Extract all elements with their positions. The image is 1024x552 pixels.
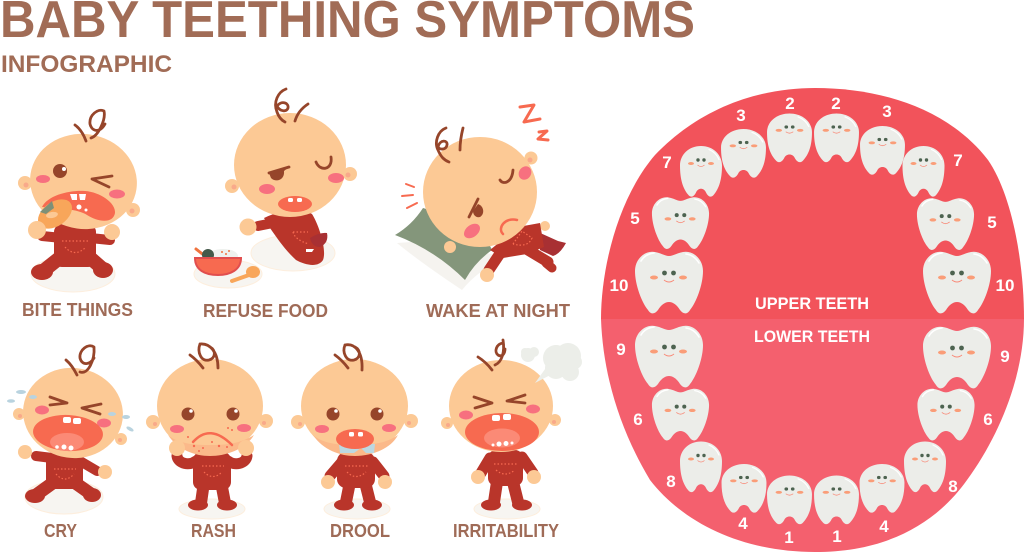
mouth xyxy=(42,191,115,221)
tooth 5 upper right: 5 xyxy=(987,213,997,232)
body xyxy=(480,221,566,282)
upper teeth row xyxy=(610,94,1014,313)
tooth 5 upper left xyxy=(630,197,709,249)
label: refuse food: REFUSE FOOD xyxy=(203,301,328,321)
steam cloud xyxy=(521,343,582,383)
tooth 10 upper left: 10 xyxy=(610,276,628,295)
cheeks xyxy=(516,164,534,182)
hands xyxy=(28,221,46,239)
tooth 4 lower left xyxy=(722,464,766,533)
wink xyxy=(316,157,331,168)
tooth 1 lower right xyxy=(814,476,859,546)
tooth 6 lower right xyxy=(917,389,993,441)
ground shadow xyxy=(179,499,245,519)
ground shadow xyxy=(474,499,540,519)
tooth 7 upper left xyxy=(662,146,722,197)
tooth 4 lower right: 4 xyxy=(879,517,889,536)
hair xyxy=(276,89,308,122)
tooth 9 lower left: 9 xyxy=(616,340,626,359)
eye xyxy=(53,164,67,178)
subtitle: INFOGRAPHIC xyxy=(1,51,172,78)
tooth 10 upper right: 10 xyxy=(996,276,1014,295)
tooth 2 upper right: 2 xyxy=(831,94,841,113)
ear xyxy=(444,241,456,253)
label: rash: RASH xyxy=(191,521,236,541)
tooth 7 upper right xyxy=(902,146,963,197)
ground shadow xyxy=(31,256,115,292)
tooth 8 lower left: 8 xyxy=(666,472,676,491)
hands xyxy=(169,440,185,456)
cheeks xyxy=(35,406,49,414)
tooth 3 upper left xyxy=(721,106,766,178)
tooth 8 lower right: 8 xyxy=(948,477,958,496)
head xyxy=(449,360,553,452)
upper gum xyxy=(601,88,1024,319)
head xyxy=(17,361,129,465)
label: drool: DROOL xyxy=(330,521,390,541)
lower teeth label: LOWER TEETH xyxy=(754,328,870,346)
baby: rash xyxy=(146,344,273,519)
hair xyxy=(66,346,94,375)
tooth 8 lower right xyxy=(904,442,958,496)
tooth 6 lower left xyxy=(633,389,709,441)
teething ring xyxy=(33,193,77,235)
ears xyxy=(18,176,32,190)
tooth 2 upper left xyxy=(767,94,812,162)
upper teeth label: UPPER TEETH xyxy=(755,295,869,313)
body xyxy=(177,452,247,510)
ground shadow xyxy=(324,499,390,519)
food plate and bowl xyxy=(194,249,262,288)
chin shade xyxy=(168,435,254,456)
lower teeth row xyxy=(616,326,1010,547)
eyes xyxy=(182,408,194,420)
tooth 9 lower left xyxy=(616,326,703,387)
tooth 1 lower left xyxy=(767,476,812,547)
tooth 8 lower left xyxy=(666,442,722,492)
tooth 4 lower left: 4 xyxy=(738,514,748,533)
eyes xyxy=(326,408,340,420)
tooth 5 upper right xyxy=(917,198,997,250)
hair xyxy=(75,110,105,141)
label: irritability: IRRITABILITY xyxy=(453,521,559,541)
tooth 9 lower right: 9 xyxy=(1000,347,1010,366)
ears xyxy=(13,408,25,420)
tooth 3 upper right xyxy=(860,102,905,175)
baby: irritability xyxy=(441,340,582,519)
hair xyxy=(478,340,505,370)
mouth xyxy=(336,429,374,449)
tooth 9 lower right xyxy=(923,327,1010,388)
baby: wake at night xyxy=(395,105,566,290)
open eye xyxy=(473,204,483,217)
hair xyxy=(436,128,463,162)
cheeks xyxy=(459,410,473,420)
body xyxy=(31,224,113,280)
teeth xyxy=(70,194,86,200)
ears xyxy=(146,415,160,429)
cheeks xyxy=(170,425,184,433)
body xyxy=(321,452,392,510)
label: cry: CRY xyxy=(44,521,77,541)
squeezed eyes xyxy=(50,397,101,414)
rash dots xyxy=(187,427,233,452)
head xyxy=(301,359,408,453)
angry eye xyxy=(269,167,289,180)
ears xyxy=(291,415,305,429)
tooth 1 lower right: 1 xyxy=(832,527,842,546)
cheeks xyxy=(36,175,50,183)
hair xyxy=(190,344,218,368)
tooth 2 upper right xyxy=(814,94,859,162)
tooth 7 upper left: 7 xyxy=(662,153,672,172)
snoring z xyxy=(520,105,548,140)
tooth 3 upper right: 3 xyxy=(882,102,892,121)
cheeks xyxy=(315,425,329,433)
winking eye xyxy=(92,176,112,187)
tooth 4 lower right xyxy=(860,464,904,536)
ears xyxy=(225,179,239,193)
tooth 7 upper right: 7 xyxy=(953,151,963,170)
tears xyxy=(7,390,134,433)
tooth 10 upper left xyxy=(610,252,703,313)
body xyxy=(18,445,112,503)
tooth 2 upper left: 2 xyxy=(785,94,795,113)
teeth xyxy=(492,415,500,421)
lower gum xyxy=(601,319,1024,552)
teeth xyxy=(63,417,71,423)
chin shade xyxy=(313,435,398,456)
tooth 6 lower right: 6 xyxy=(983,410,993,429)
tooth 5 upper left: 5 xyxy=(630,209,640,228)
panel: mouth teeth chart xyxy=(601,88,1024,552)
head xyxy=(157,359,263,453)
mouth xyxy=(501,219,517,234)
mouth xyxy=(465,413,539,451)
pillow xyxy=(395,208,505,290)
tooth 1 lower left: 1 xyxy=(784,528,794,547)
frown xyxy=(193,433,232,445)
ground shadow xyxy=(251,235,335,271)
body xyxy=(471,450,541,510)
baby: refuse food xyxy=(194,89,357,288)
restless marks xyxy=(402,184,417,208)
label: wake at night: WAKE AT NIGHT xyxy=(426,301,570,321)
baby: bite things xyxy=(18,110,143,292)
mouth xyxy=(32,413,104,453)
ears xyxy=(441,417,453,429)
head xyxy=(234,113,346,217)
drool xyxy=(339,444,375,453)
closed eye xyxy=(500,170,513,183)
tooth 10 upper right xyxy=(923,252,1014,313)
baby: drool xyxy=(291,345,418,519)
squeezed eyes xyxy=(474,395,525,408)
baby: cry xyxy=(7,346,134,514)
mouth xyxy=(278,196,312,212)
hair xyxy=(335,345,362,370)
ground shadow xyxy=(25,480,103,514)
head xyxy=(24,127,143,236)
tooth 3 upper left: 3 xyxy=(736,106,746,125)
body xyxy=(240,210,327,265)
label: bite things: BITE THINGS xyxy=(22,300,133,320)
cheeks xyxy=(259,184,275,194)
tooth 6 lower left: 6 xyxy=(633,410,643,429)
head xyxy=(423,137,537,247)
